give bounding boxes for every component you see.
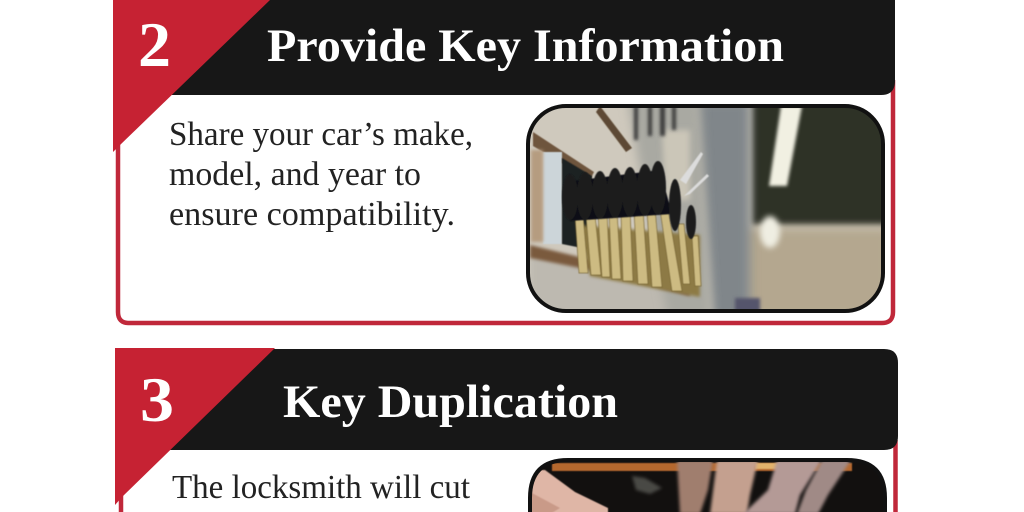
- photo: hands cutting a key: [528, 458, 888, 512]
- panel outline: step 3: [121, 440, 896, 512]
- header bar: step 2: [170, 0, 895, 95]
- text block: step 2 description: [169, 116, 473, 233]
- step number 2: 2: [138, 9, 171, 80]
- keys: black heads: [562, 161, 696, 239]
- keys: front blades: [575, 209, 701, 291]
- number flag: step 3: [115, 348, 275, 505]
- heading: Key Duplication: Key Duplication: [283, 376, 618, 428]
- step number 3: 3: [140, 364, 174, 435]
- keys: rear blades: [578, 225, 700, 297]
- text block: step 3 description: The locksmith will cut: [172, 469, 471, 506]
- panel: step 3: [115, 348, 898, 512]
- panel: step 2: [113, 0, 895, 323]
- header bar: step 3: [170, 349, 898, 450]
- panel outline: step 2: [118, 80, 893, 323]
- photo: rack of car keys: [526, 100, 892, 320]
- text block: step 2 description: ensure compatibility.: [169, 196, 455, 233]
- infographic canvas: [113, 0, 898, 512]
- number flag: step 2: [113, 0, 270, 152]
- text block: step 2 description: Share your car’s make,: [169, 116, 473, 153]
- heading: Provide Key Information: Provide Key Information: [267, 20, 784, 72]
- text block: step 2 description: model, and year to: [169, 156, 421, 193]
